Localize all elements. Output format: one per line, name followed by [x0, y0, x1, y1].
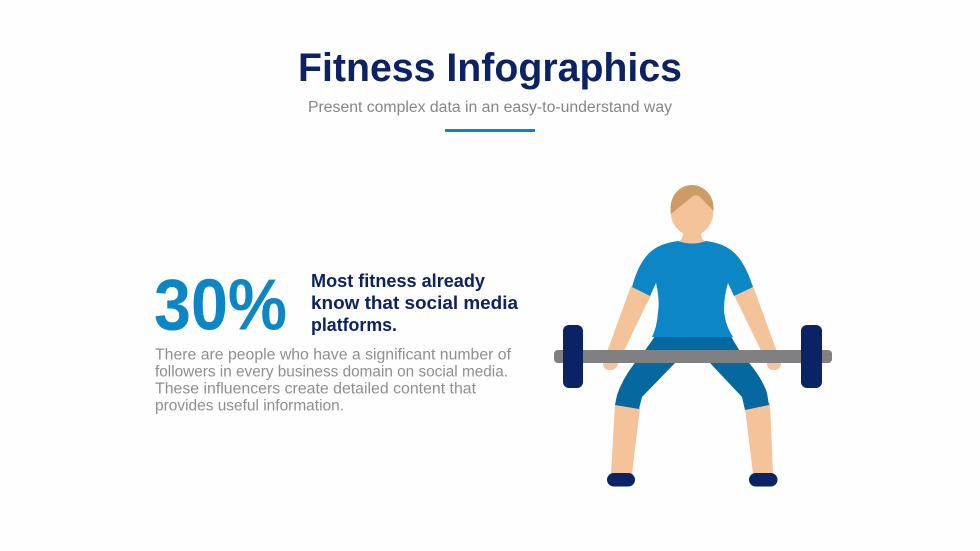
body text: There are people who have a significant number of — [155, 346, 512, 364]
statistic heading — [311, 270, 519, 335]
left leg — [611, 404, 640, 474]
illustration: weightlifter — [554, 185, 832, 486]
hair — [671, 185, 714, 214]
statistic: 30%: 30% — [154, 266, 287, 346]
body text: provides useful information. — [155, 398, 344, 414]
right shoe — [749, 473, 778, 486]
left shoe — [607, 473, 635, 486]
statistic heading: Most fitness already — [311, 270, 486, 291]
left weight plate — [563, 325, 583, 388]
body text — [155, 346, 512, 414]
right arm — [734, 286, 781, 370]
right leg — [745, 403, 773, 474]
barbell bar — [554, 350, 832, 363]
statistic heading: platforms. — [311, 314, 397, 335]
title underline accent — [445, 129, 535, 132]
body text: followers in every business domain on social media. — [155, 364, 508, 380]
head — [670, 186, 714, 236]
shorts — [615, 336, 769, 410]
title: Fitness Infographics — [298, 46, 682, 90]
subtitle: Present complex data in an easy-to-understand way — [308, 99, 672, 116]
shirt — [632, 241, 753, 337]
right weight plate — [801, 325, 822, 388]
body text: These influencers create detailed content that — [155, 380, 477, 398]
statistic heading: know that social media — [311, 292, 519, 313]
left arm — [603, 286, 651, 370]
neck — [678, 225, 706, 244]
